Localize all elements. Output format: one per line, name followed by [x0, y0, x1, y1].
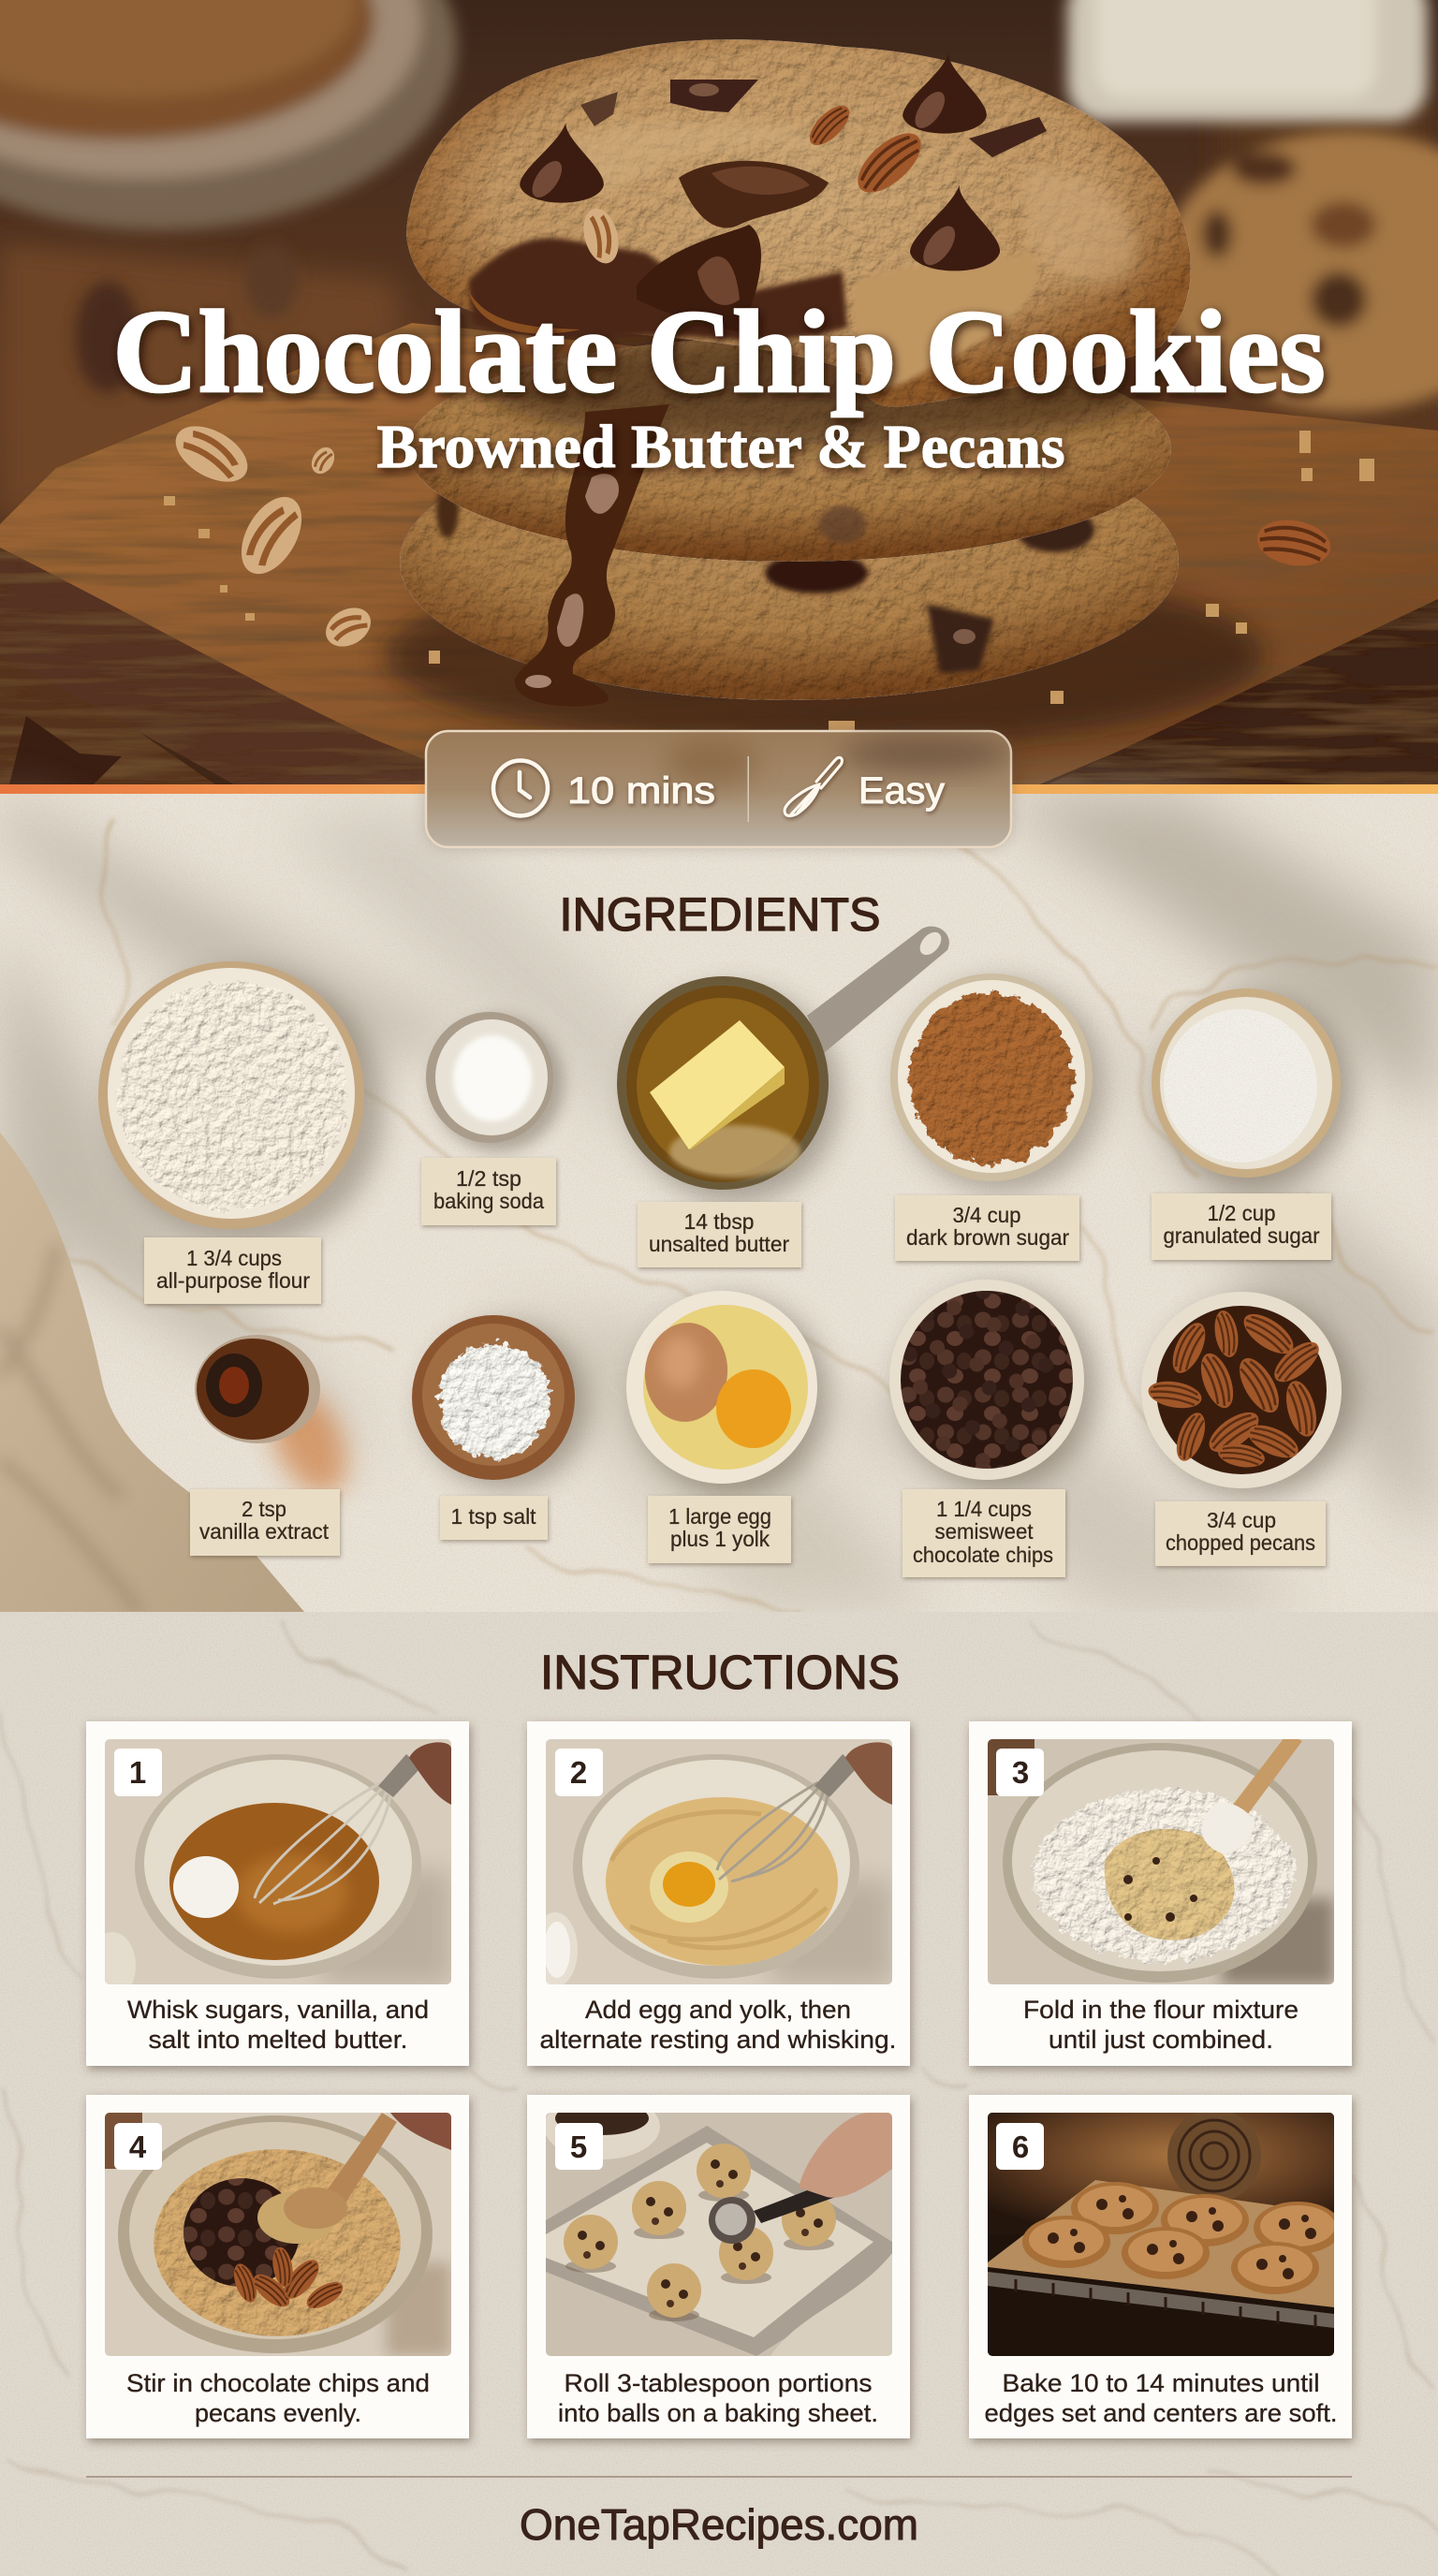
- label: granulated sugar: [1152, 1193, 1331, 1260]
- step 5 photo: rolling dough balls: [544, 2094, 892, 2356]
- label: granulated sugar: 1/2 cup: [1208, 1201, 1275, 1225]
- cutting board: [0, 323, 1438, 784]
- bowl: dark brown sugar: [890, 973, 1105, 1192]
- badge 3: [996, 1749, 1044, 1796]
- hero photo: cookie stack on wooden board: [0, 0, 1438, 784]
- label: pecans: chopped pecans: [1166, 1530, 1315, 1555]
- bottom cookie: [400, 423, 1179, 700]
- badge 1: [114, 1749, 162, 1796]
- step 6 caption: Bake 10 to 14 minutes until: [1002, 2369, 1320, 2397]
- vanilla extract bottle: [195, 1335, 362, 1506]
- step 3 caption: until just combined.: [1049, 2026, 1273, 2054]
- instructions heading: INSTRUCTIONS: [540, 1646, 900, 1699]
- step 5 caption: [558, 2369, 878, 2427]
- step 1 caption: [127, 1996, 429, 2054]
- icon: clock: [493, 760, 548, 816]
- step 4 caption: pecans evenly.: [195, 2399, 361, 2427]
- scattered pecans and crumbs on board: [9, 243, 1374, 784]
- label: egg: [648, 1496, 791, 1563]
- top cookie: [406, 39, 1191, 407]
- blurred plate with cookies, top left: [0, 0, 457, 230]
- step card 4: [86, 2095, 469, 2438]
- label: pecans: [1155, 1501, 1326, 1566]
- label: salt: 1 tsp salt: [451, 1504, 536, 1529]
- label: flour: 1 3/4 cups: [186, 1246, 282, 1270]
- badge 6: [996, 2123, 1044, 2170]
- step 1 caption: Whisk sugars, vanilla, and: [127, 1996, 429, 2024]
- step 2 caption: alternate resting and whisking.: [539, 2026, 897, 2054]
- badge 2: [555, 1749, 603, 1796]
- text: 10 mins: 10 mins: [567, 770, 715, 812]
- label: baking soda: baking soda: [433, 1189, 544, 1213]
- label: chocolate chips: [902, 1489, 1065, 1577]
- label: dark brown sugar: [895, 1195, 1079, 1261]
- ingredient labels: [144, 1158, 1331, 1577]
- label: pecans: 3/4 cup: [1207, 1508, 1276, 1532]
- bowl: chopped pecans: [1141, 1292, 1354, 1497]
- instructions marble background: [0, 1612, 1438, 2576]
- chocolate kisses and chunks: [520, 53, 1047, 271]
- label: granulated sugar: granulated sugar: [1163, 1223, 1320, 1248]
- step card 6: [969, 2095, 1352, 2438]
- pecans in cookie: [578, 99, 931, 268]
- label: salt: [440, 1496, 548, 1540]
- step 1 caption: salt into melted butter.: [148, 2026, 408, 2054]
- step 2 caption: [539, 1996, 897, 2054]
- label: butter: unsalted butter: [649, 1232, 789, 1256]
- bowl: baking soda: [426, 1012, 564, 1151]
- saucepan with butter: [617, 927, 949, 1203]
- label: dark brown sugar: dark brown sugar: [906, 1225, 1069, 1250]
- ingredients marble background: [0, 794, 1438, 1612]
- step 5 caption: Roll 3-tablespoon portions: [564, 2369, 873, 2397]
- bowl: granulated sugar: [1152, 988, 1352, 1187]
- step 2 caption: Add egg and yolk, then: [585, 1996, 851, 2024]
- step 4 caption: [126, 2369, 430, 2427]
- label: vanilla extract: 2 tsp: [242, 1497, 286, 1521]
- label: baking soda: 1/2 tsp: [456, 1166, 521, 1191]
- badge 2: 2: [570, 1755, 587, 1790]
- step 1 photo: whisking butter: [89, 1739, 451, 1999]
- step 5 caption: into balls on a baking sheet.: [558, 2399, 878, 2427]
- step 3 caption: Fold in the flour mixture: [1023, 1996, 1299, 2024]
- label: egg: plus 1 yolk: [670, 1527, 770, 1551]
- label: flour: [144, 1237, 321, 1304]
- chocolate drip: [515, 404, 669, 707]
- step 4 photo: stirring chips: [105, 2113, 451, 2356]
- blurred milk glass, top right: [1067, 0, 1428, 122]
- label: vanilla extract: vanilla extract: [199, 1519, 330, 1544]
- label: dark brown sugar: 3/4 cup: [953, 1203, 1020, 1227]
- step card 3: [969, 1721, 1352, 2066]
- label: butter: [638, 1202, 801, 1267]
- step 6 photo: cookies in oven: [988, 2109, 1342, 2356]
- subtitle: Browned Butter & Pecans: [376, 413, 1065, 481]
- step 3 caption: [1023, 1996, 1299, 2054]
- step card 1: [86, 1721, 469, 2066]
- badge 5: [555, 2123, 603, 2170]
- step 4 caption: Stir in chocolate chips and: [126, 2369, 430, 2397]
- step 6 caption: edges set and centers are soft.: [985, 2399, 1337, 2427]
- title: Chocolate Chip Cookies: [112, 287, 1326, 417]
- badge 4: [114, 2123, 162, 2170]
- bowl: egg and yolk: [626, 1291, 829, 1495]
- middle cookie: [407, 332, 1171, 562]
- badge 4: 4: [129, 2130, 147, 2164]
- label: chocolate chips: semisweet: [934, 1519, 1034, 1544]
- label: chocolate chips: chocolate chips: [913, 1543, 1053, 1567]
- bowl: salt: [412, 1315, 588, 1488]
- label: vanilla extract: [190, 1489, 340, 1556]
- step 2 photo: adding egg: [533, 1739, 892, 1987]
- badge 5: 5: [570, 2130, 587, 2164]
- label: flour: all-purpose flour: [156, 1268, 310, 1293]
- ingredients heading: INGREDIENTS: [560, 888, 880, 941]
- linen cloth: [0, 1133, 304, 1612]
- text: Easy: Easy: [858, 770, 945, 812]
- orange divider bar: [0, 784, 1438, 794]
- label: baking soda: [421, 1158, 556, 1225]
- label: chocolate chips: 1 1/4 cups: [936, 1497, 1032, 1521]
- bowl: flour: [98, 961, 384, 1247]
- step 3 photo: folding flour: [988, 1734, 1334, 1984]
- time and difficulty pill: [426, 731, 1011, 847]
- step card 2: [527, 1721, 910, 2066]
- label: butter: 14 tbsp: [683, 1209, 755, 1234]
- icon: whisk: [785, 757, 842, 816]
- label: egg: 1 large egg: [668, 1504, 771, 1529]
- cookie shadow: [384, 562, 1264, 749]
- badge 1: 1: [129, 1755, 146, 1790]
- blurred cookie, right: [1161, 131, 1438, 412]
- footer: site name: OneTapRecipes.com: [520, 2500, 918, 2549]
- molten chocolate centre: [637, 161, 829, 332]
- badge 6: 6: [1012, 2130, 1029, 2164]
- badge 3: 3: [1012, 1755, 1029, 1790]
- step card 5: [527, 2094, 910, 2438]
- step 6 caption: [985, 2369, 1337, 2427]
- bowl: chocolate chips: [889, 1280, 1096, 1488]
